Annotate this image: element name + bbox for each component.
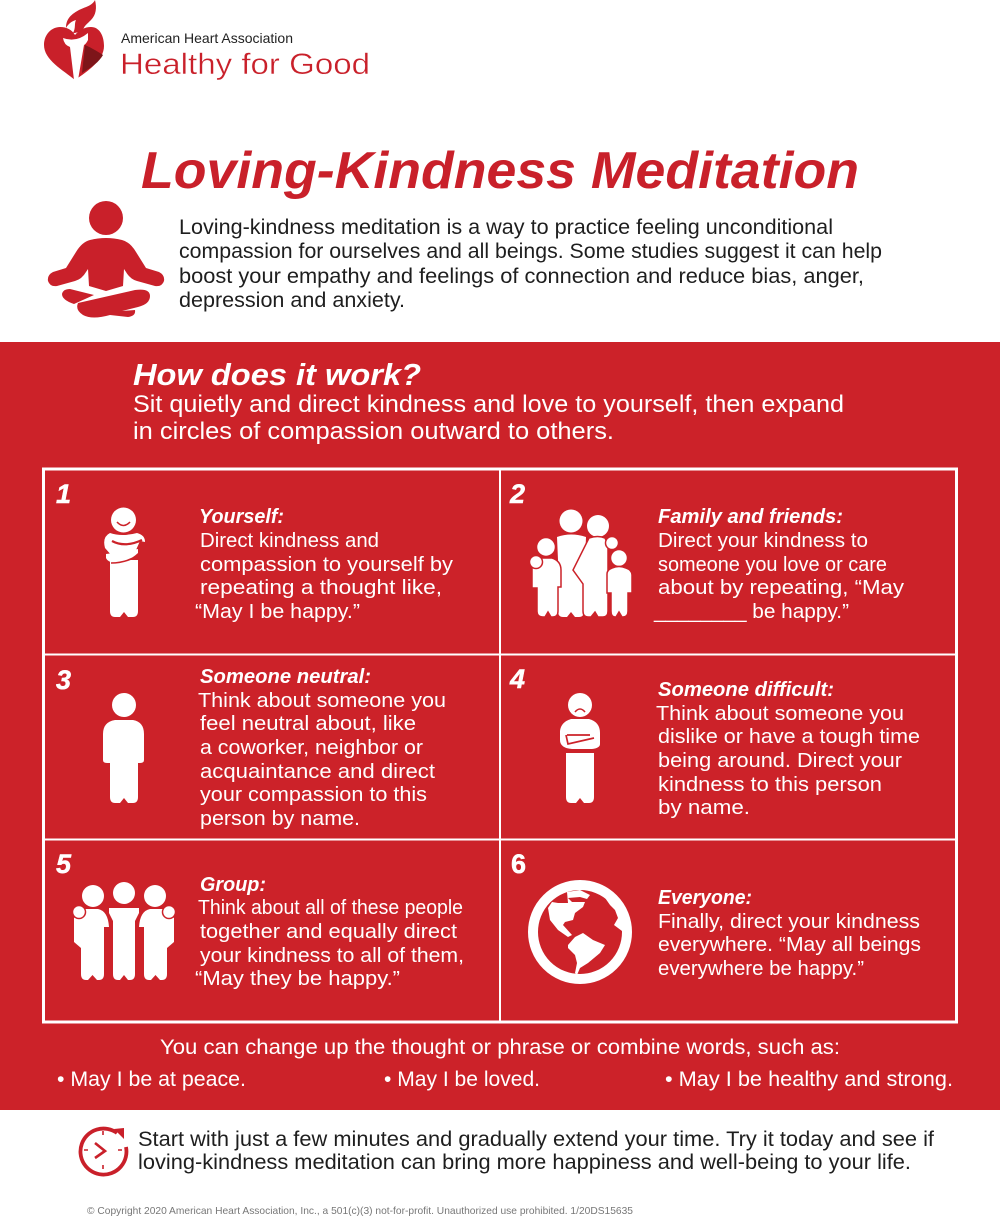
text: someone neutral: feel neutral about, like <box>200 712 416 735</box>
text: everyone: Everyone: <box>658 887 752 909</box>
text: someone difficult <box>656 679 920 819</box>
phrase suggestions <box>57 1036 953 1091</box>
text: someone difficult: dislike or have a tough time <box>658 725 920 748</box>
cell 1: yourself <box>56 479 454 623</box>
intro text: compassion for ourselves and all beings. Some studies suggest it can help <box>179 240 882 263</box>
number 4: 4 <box>509 664 525 694</box>
copyright: © Copyright 2020 American Heart Association, Inc., a 501(c)(3) not-for-profit. Unauthorized use prohibited. 1/20DS15635 <box>87 1205 633 1217</box>
intro text: depression and anxiety. <box>179 289 405 312</box>
text: yourself: Direct kindness and <box>200 529 379 552</box>
text: someone difficult: by name. <box>658 796 750 819</box>
text: someone neutral: a coworker, neighbor or <box>200 736 423 759</box>
text: family and friends: someone you love or care <box>658 553 887 576</box>
text: someone difficult: being around. Direct your <box>658 749 902 772</box>
text: group: Group: <box>200 874 266 896</box>
icon: heart and torch <box>44 0 104 80</box>
closing text <box>138 1128 934 1174</box>
closing text: loving-kindness meditation can bring more happiness and well-being to your life. <box>138 1151 911 1174</box>
text: family and friends: Direct your kindness to <box>658 529 868 552</box>
text: group: “May they be happy.” <box>195 967 400 990</box>
text: group: your kindness to all of them, <box>200 944 464 967</box>
closing text: Start with just a few minutes and gradually extend your time. Try it today and see if <box>138 1128 934 1151</box>
cell 6: everyone <box>511 849 921 980</box>
icon: meditating person <box>48 201 164 318</box>
phrase suggestions: • May I be healthy and strong. <box>665 1068 953 1091</box>
text: someone difficult: Think about someone you <box>656 702 904 725</box>
phrase suggestions: • May I be at peace. <box>57 1068 246 1091</box>
icon: three people <box>72 882 176 980</box>
icon: frowning person with crossed arms <box>560 693 600 803</box>
text: someone neutral: your compassion to this <box>200 783 427 806</box>
text: yourself: compassion to yourself by <box>200 553 454 576</box>
icon: globe <box>533 885 629 979</box>
intro text: boost your empathy and feelings of connection and reduce bias, anger, <box>179 265 864 288</box>
subheading: Sit quietly and direct kindness and love to yourself, then expand <box>133 391 844 418</box>
subheading: in circles of compassion outward to others. <box>133 418 614 445</box>
text: someone difficult: Someone difficult: <box>658 679 834 701</box>
intro text: Loving-kindness meditation is a way to practice feeling unconditional <box>179 216 833 239</box>
text: everyone: everywhere be happy.” <box>658 957 864 980</box>
number 6: 6 <box>511 849 526 879</box>
text: family and friends <box>653 506 905 623</box>
subheading <box>133 391 844 445</box>
cell 4: someone difficult <box>509 664 920 819</box>
number 5: 5 <box>56 849 72 879</box>
heading: How does it work?: How does it work? <box>133 357 421 392</box>
text: everyone: everywhere. “May all beings <box>658 933 921 956</box>
number 3: 3 <box>56 665 71 695</box>
text: someone neutral <box>198 666 446 830</box>
text: someone difficult: kindness to this person <box>658 773 882 796</box>
number 1: 1 <box>56 479 71 509</box>
text: yourself: Yourself: <box>199 506 284 528</box>
text: yourself: “May I be happy.” <box>195 600 360 623</box>
phrase suggestions: • May I be loved. <box>384 1068 540 1091</box>
number 2: 2 <box>509 479 525 509</box>
logo text: American Heart Association: American Heart Association <box>121 30 293 46</box>
text: someone neutral: person by name. <box>200 807 360 830</box>
text: everyone: Finally, direct your kindness <box>658 910 920 933</box>
cell 5: group <box>56 849 464 990</box>
icon: clock with arrow <box>80 1128 126 1175</box>
icon: family group <box>530 510 632 617</box>
text: family and friends: Family and friends: <box>658 506 843 528</box>
title: Loving-Kindness Meditation <box>141 142 859 200</box>
logo: American Heart Association Healthy for Good <box>44 0 370 81</box>
text: group: together and equally direct <box>200 920 457 943</box>
phrase suggestions: You can change up the thought or phrase or combine words, such as: <box>160 1036 840 1059</box>
cell 2: family and friends <box>509 479 905 623</box>
text: yourself <box>195 506 454 623</box>
text: group: Think about all of these people <box>198 896 463 919</box>
text: everyone <box>658 887 921 980</box>
icon: neutral person <box>103 693 144 803</box>
panel: how does it work <box>0 342 1000 1110</box>
text: family and friends: about by repeating, “May <box>658 576 905 599</box>
text: someone neutral: Someone neutral: <box>200 666 371 688</box>
text: yourself: repeating a thought like, <box>200 576 442 599</box>
intro text <box>179 216 882 312</box>
cell 3: someone neutral <box>56 665 446 830</box>
text: group <box>195 874 464 990</box>
text: someone neutral: acquaintance and direct <box>200 760 435 783</box>
icon: person hugging self <box>104 508 145 617</box>
logo text: Healthy for Good: Healthy for Good <box>120 48 370 81</box>
text: family and friends: ________ be happy.” <box>653 600 849 623</box>
text: someone neutral: Think about someone you <box>198 689 446 712</box>
